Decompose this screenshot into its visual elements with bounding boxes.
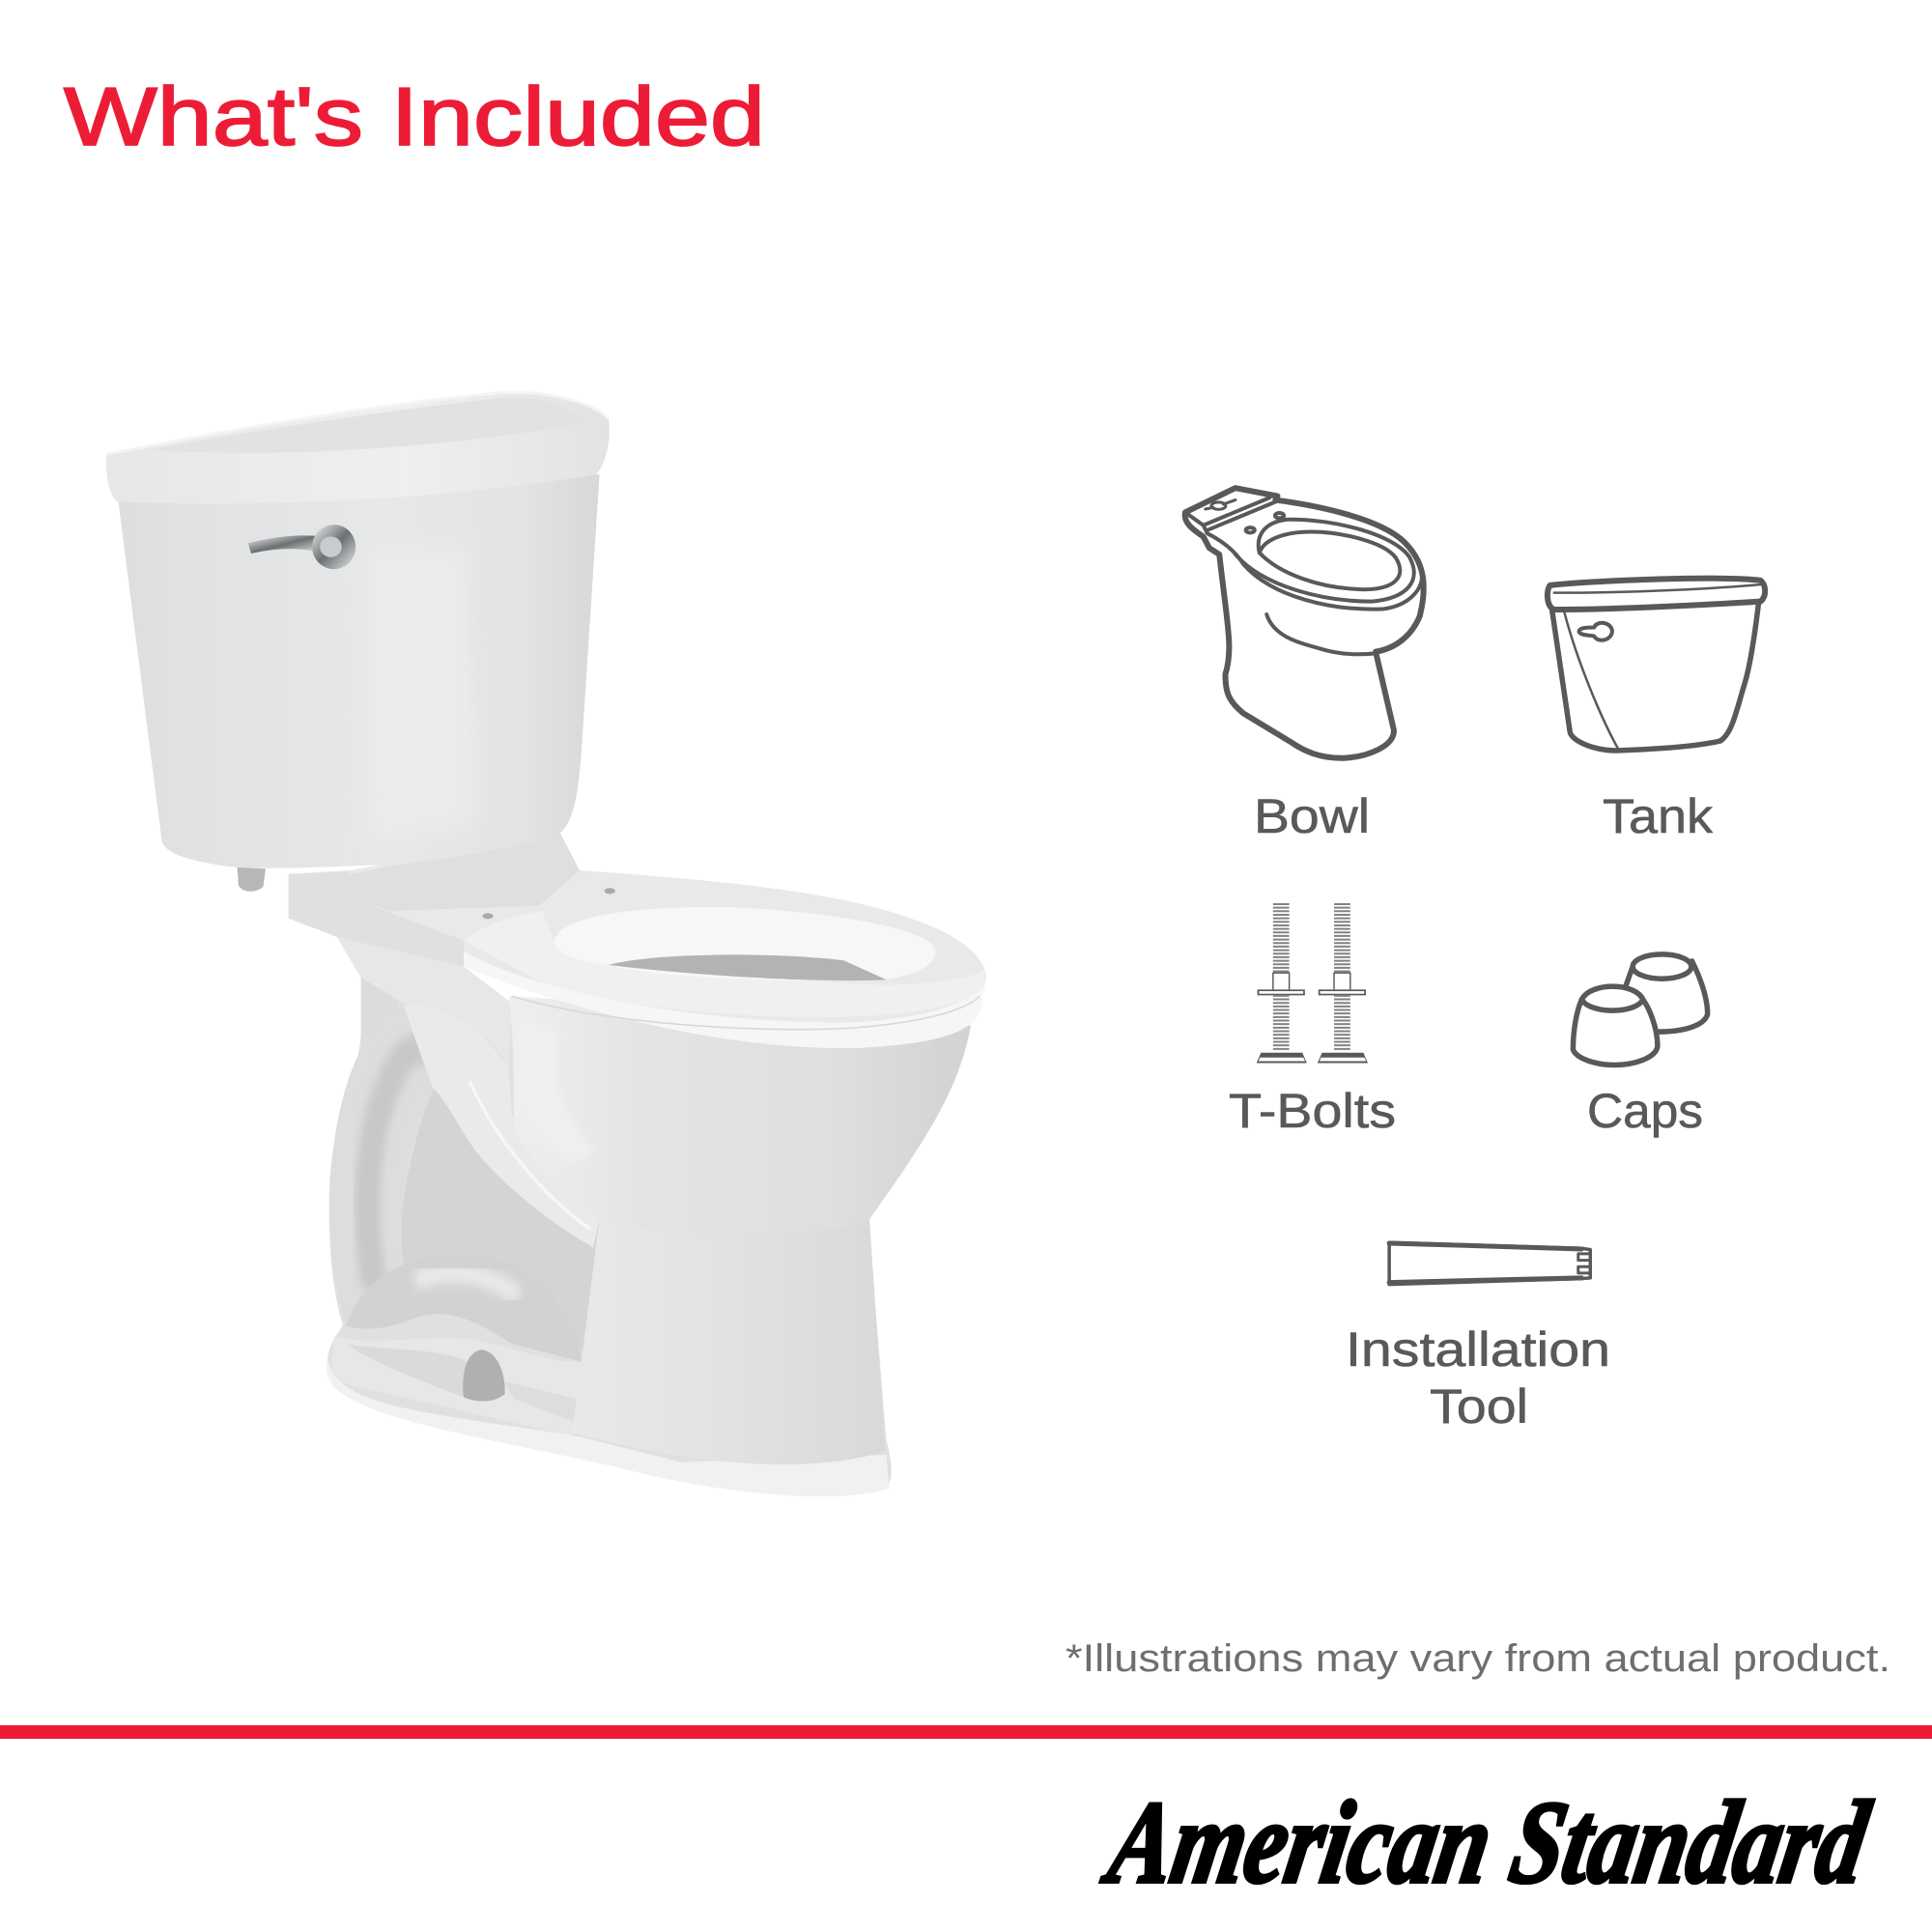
under-deck neck <box>337 937 512 1070</box>
tray bolt cap <box>463 1350 505 1402</box>
tank lid <box>106 392 610 503</box>
trapway loop <box>329 1005 469 1325</box>
footnote: *Illustrations may vary from actual product. <box>1065 1637 1890 1680</box>
rim and deck <box>289 834 986 1048</box>
tank body <box>118 474 600 868</box>
title: What's Included <box>64 71 765 163</box>
bowl underside <box>509 996 971 1236</box>
bolt 2 <box>1318 903 1368 1063</box>
label: installation tool <box>1346 1322 1610 1434</box>
flush handle <box>248 535 319 554</box>
label: caps: Caps <box>1587 1084 1703 1138</box>
red divider bar <box>0 1725 1932 1739</box>
label: tank: Tank <box>1603 789 1714 843</box>
icon: installation tool <box>1389 1242 1590 1285</box>
interior shadow <box>397 1089 600 1351</box>
base tray <box>330 1336 582 1436</box>
product photo: toilet <box>106 392 986 1496</box>
label: installation tool: Tool <box>1430 1379 1528 1434</box>
icon: tank <box>1548 579 1765 751</box>
back strip <box>361 978 404 1055</box>
label: bowl: Bowl <box>1254 789 1370 843</box>
icon: t-bolts <box>1257 903 1368 1063</box>
icon: caps <box>1573 954 1708 1065</box>
pedestal <box>572 1218 885 1464</box>
toilet silhouette <box>327 937 971 1496</box>
lower sweep <box>346 1254 583 1362</box>
trapway ribbon <box>404 1005 600 1248</box>
drain stub <box>238 867 266 892</box>
label: installation tool: Installation <box>1346 1322 1610 1377</box>
icon: bowl <box>1185 488 1424 758</box>
label: t-bolts: T-Bolts <box>1229 1084 1396 1138</box>
base flange <box>327 1358 890 1496</box>
bolt 1 <box>1257 903 1307 1063</box>
bowl opening <box>554 907 936 980</box>
